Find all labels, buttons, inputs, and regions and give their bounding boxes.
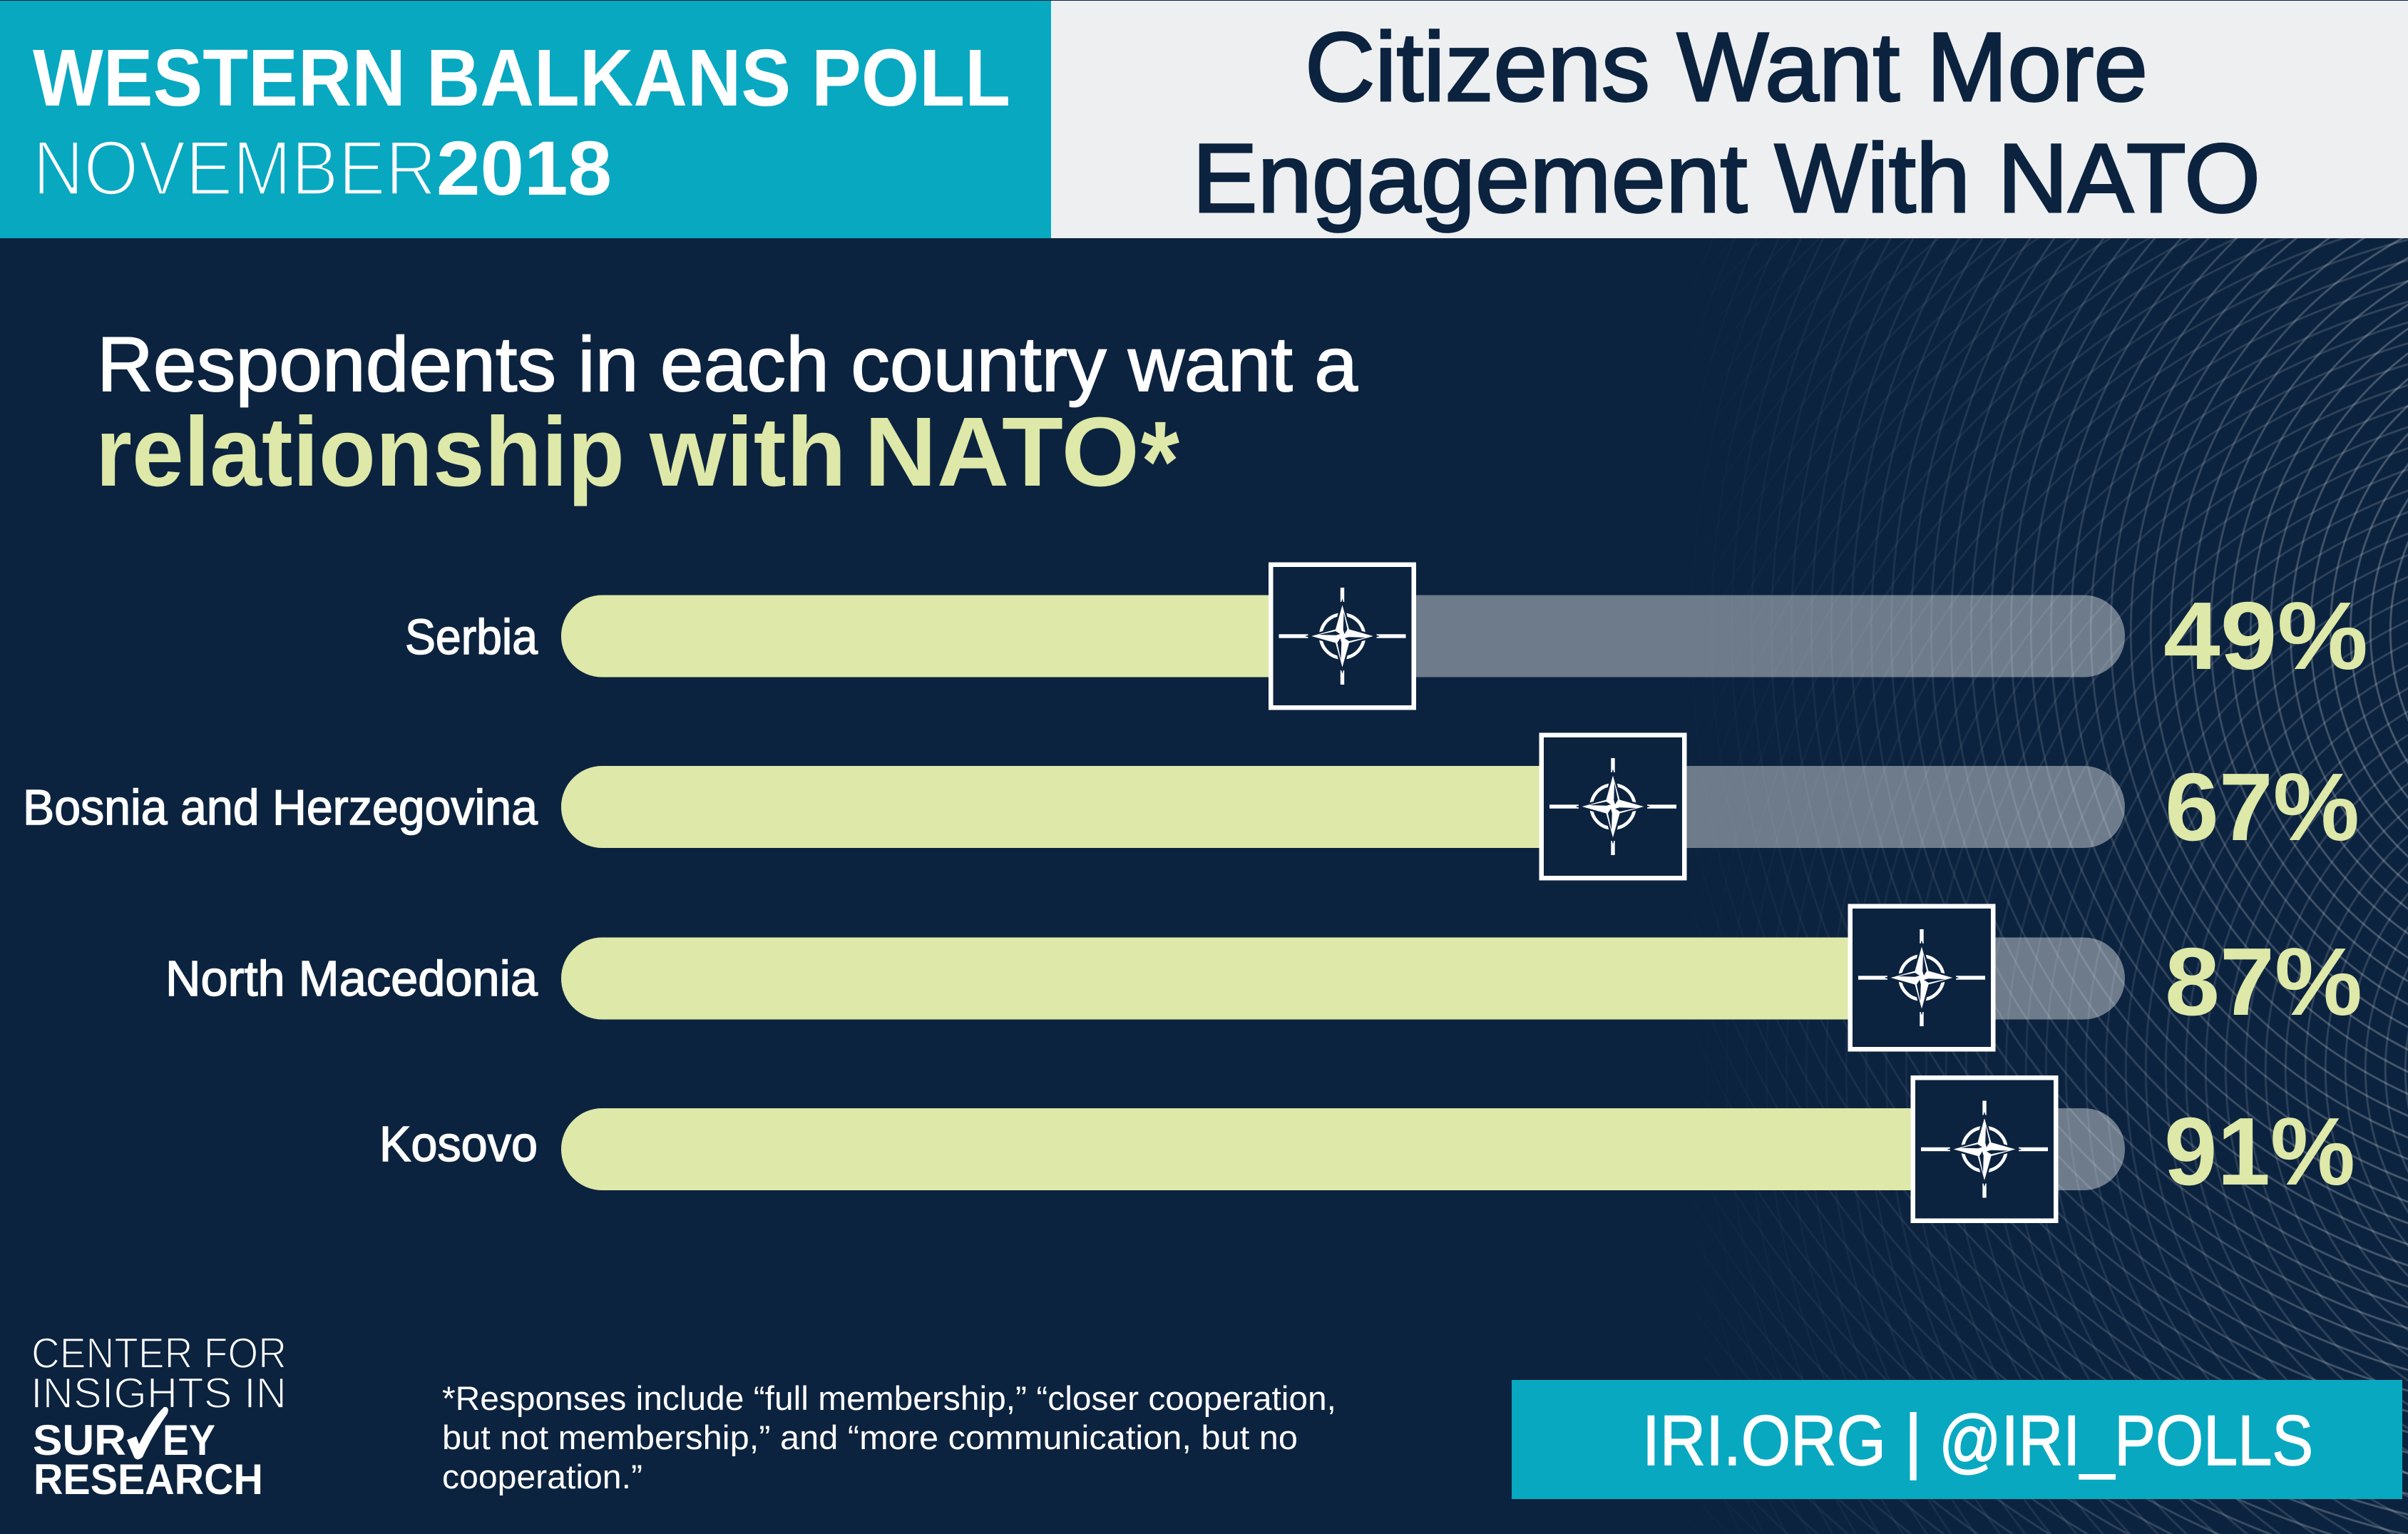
header panel: poll name <box>0 1 1051 238</box>
background pattern: concentric arcs <box>1676 238 2408 1534</box>
bar row: North Macedonia <box>165 906 2362 1049</box>
separator: | <box>1904 1401 1922 1481</box>
subheading line 1: Respondents in each country want a <box>97 321 1358 408</box>
footnote line 2: but not membership,” and “more communication, but no <box>442 1418 1298 1456</box>
bar value fill <box>561 1108 1984 1190</box>
heading: 2018: 2018 <box>436 125 612 211</box>
heading: Western Balkans Poll: WESTERN BALKANS POLL <box>33 33 1010 123</box>
bar row: Kosovo <box>379 1078 2355 1221</box>
bar row: Serbia <box>405 565 2368 707</box>
bar value fill <box>561 937 1922 1020</box>
footnote line 1: *Responses include “full membership,” “closer cooperation, <box>442 1379 1336 1417</box>
social handle: @IRI_POLLS <box>1939 1401 2313 1480</box>
logo: Center for Insights in Survey Research <box>31 1329 287 1503</box>
heading: November: NOVEMBER <box>33 125 436 212</box>
icon: NATO emblem marker <box>1913 1078 2056 1221</box>
title line 2: Engagement With NATO <box>1192 124 2260 233</box>
header panel: title <box>1051 1 2408 238</box>
logo line: Insights in: INSIGHTS IN <box>31 1369 287 1417</box>
icon: NATO emblem marker <box>1850 906 1993 1049</box>
footnote <box>442 1379 1336 1495</box>
asterisk: * <box>1141 397 1180 525</box>
footnote line 3: cooperation.” <box>442 1458 642 1495</box>
bar track <box>561 1108 2125 1190</box>
bar track <box>561 595 2125 677</box>
icon: check mark <box>127 1407 168 1459</box>
subheading <box>96 321 1358 525</box>
icon: NATO emblem marker <box>1271 565 1414 707</box>
subheading line 2: with: with <box>649 397 846 507</box>
subheading line 2: NATO: NATO <box>864 397 1139 507</box>
logo line: Center for: CENTER FOR <box>31 1329 287 1377</box>
country label: North Macedonia <box>165 951 538 1006</box>
call to action banner <box>1512 1380 2402 1499</box>
country label: Serbia <box>405 609 538 665</box>
value: 91% <box>2164 1098 2355 1205</box>
country label: Kosovo <box>379 1116 538 1172</box>
website: IRI.ORG <box>1642 1401 1886 1480</box>
logo word: ey: EY <box>163 1416 215 1464</box>
title line 1: Citizens Want More <box>1305 13 2148 122</box>
value: 87% <box>2165 928 2362 1036</box>
value: 67% <box>2165 753 2360 861</box>
bar track <box>561 937 2125 1020</box>
logo word: Sur: SUR <box>33 1416 126 1464</box>
icon: NATO emblem marker <box>1542 735 1684 878</box>
bar value fill <box>561 766 1613 848</box>
logo word: Research: RESEARCH <box>34 1456 263 1503</box>
subheading line 2: relationship: relationship <box>96 397 625 507</box>
country label: Bosnia and Herzegovina <box>23 779 538 835</box>
value: 49% <box>2163 582 2368 690</box>
bar track <box>561 766 2125 848</box>
bar value fill <box>561 595 1342 677</box>
bar row: Bosnia and Herzegovina <box>23 735 2360 878</box>
